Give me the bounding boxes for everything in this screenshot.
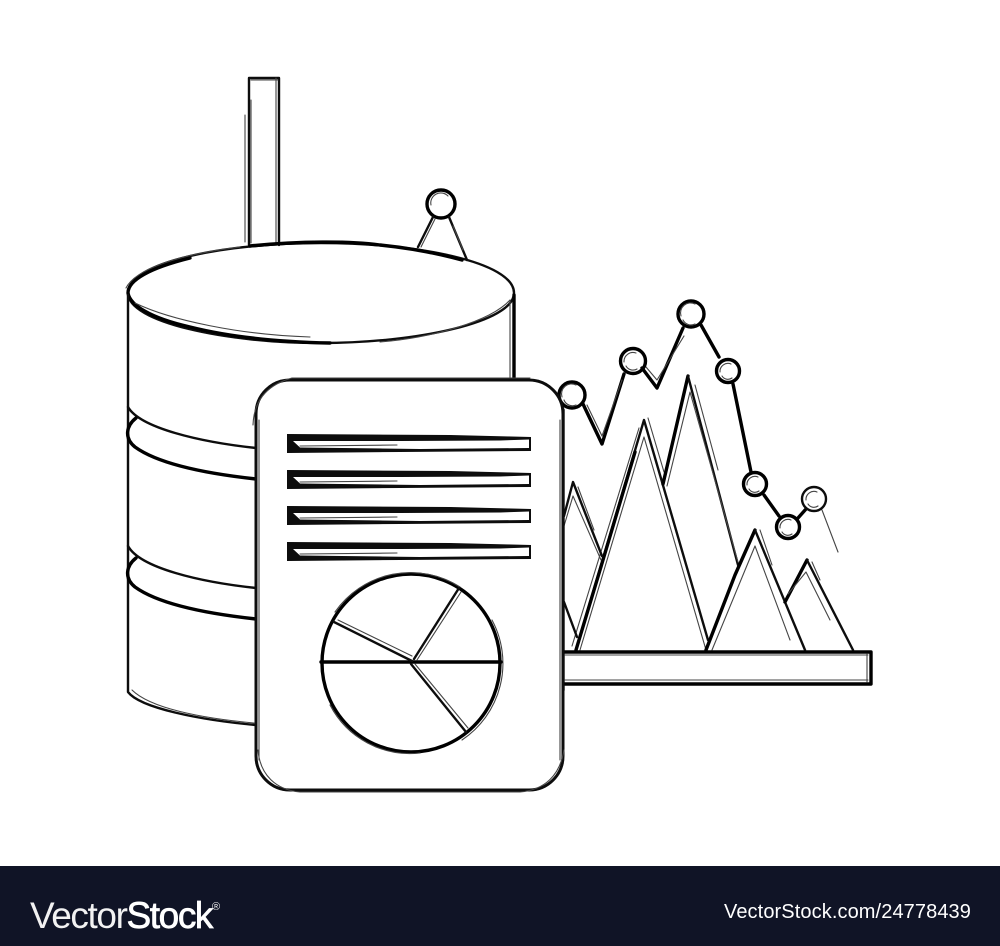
line 3 [287,506,531,525]
line chart with nodes [559,301,838,552]
footer bar [0,866,1000,946]
line 4 [287,542,531,561]
small node behind database [418,190,467,260]
image id text: VectorStock.com/24778439 [724,901,971,923]
lower band [128,546,256,588]
pie chart [321,573,503,754]
top ellipse [126,242,514,343]
cylinder sides [128,295,514,725]
mountain peaks [563,376,853,690]
antenna post [245,78,279,245]
chart behind document [559,301,871,690]
brand logo text: VectorStock® [30,895,219,936]
database cylinder [126,242,514,725]
upper band [128,407,256,448]
chart base bar [563,652,871,684]
line 1 [287,434,531,453]
text lines [287,434,531,561]
line 2 [287,470,531,489]
document [253,378,564,792]
